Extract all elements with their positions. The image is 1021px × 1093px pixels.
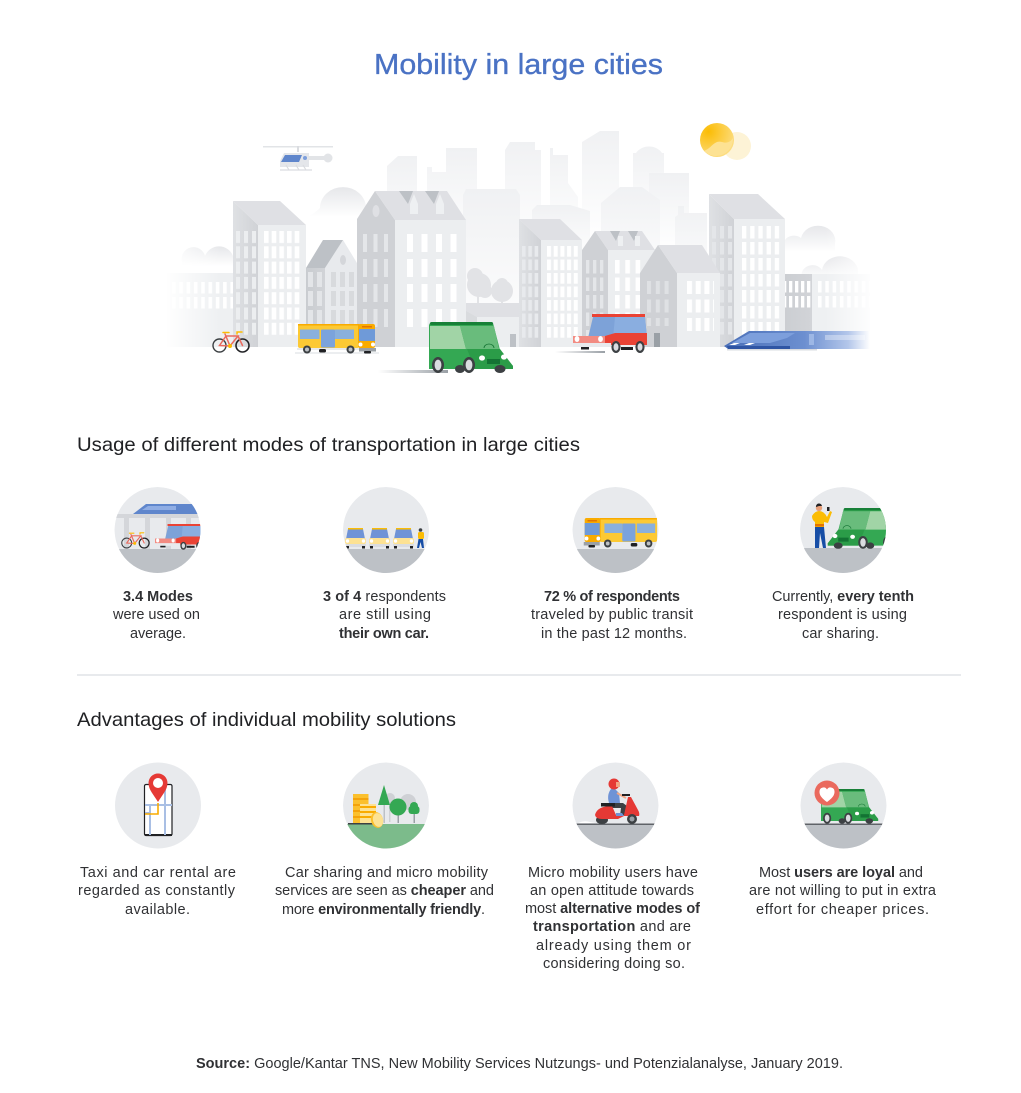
icon: coins and trees xyxy=(343,762,429,848)
icon: bicycle xyxy=(213,332,249,352)
caption: own car xyxy=(323,589,446,642)
small house xyxy=(306,240,360,347)
caption: own car: their own car. xyxy=(339,626,429,642)
icon: train, bike and car xyxy=(114,487,204,573)
panel: own car xyxy=(323,487,446,642)
building D xyxy=(519,219,582,347)
icon: three cars and person xyxy=(343,487,429,573)
caption: loyal users: effort for cheaper prices. xyxy=(756,902,929,918)
building A xyxy=(233,201,306,347)
caption: car sharing: respondent is using xyxy=(778,607,907,623)
icon: bus xyxy=(572,487,660,573)
caption: public transit: traveled by public transit xyxy=(531,607,693,623)
caption: car sharing: Currently, every tenth xyxy=(772,589,914,605)
source note: Source: Google/Kantar TNS, New Mobility Services Nutzungs- und Potenzialanalyse, January 2019. xyxy=(196,1056,843,1072)
caption: micro mobility xyxy=(525,865,700,972)
caption: average modes: average. xyxy=(130,626,186,642)
trees xyxy=(467,268,513,305)
caption: cheaper and greener: services are seen as cheaper and xyxy=(275,883,494,899)
caption: micro mobility: Micro mobility users have xyxy=(528,865,698,881)
house B xyxy=(582,231,655,347)
caption: loyal users: are not willing to put in extra xyxy=(749,883,937,899)
caption: car sharing xyxy=(772,589,914,642)
caption: micro mobility: already using them or xyxy=(536,938,691,954)
caption: car sharing: car sharing. xyxy=(802,626,879,642)
caption: average modes: were used on xyxy=(112,607,200,623)
caption: loyal users xyxy=(749,865,937,918)
caption: taxi and car rental: available. xyxy=(125,902,190,918)
panel: average modes xyxy=(112,487,204,642)
icon: person and green van xyxy=(800,487,895,573)
side fades xyxy=(165,180,875,350)
caption: taxi and car rental: Taxi and car rental are xyxy=(80,865,236,881)
panel: cheaper and greener xyxy=(275,762,494,918)
low building xyxy=(452,303,547,347)
house C xyxy=(640,245,720,347)
icon: helicopter xyxy=(263,146,333,170)
caption: micro mobility: transportation and are xyxy=(533,919,691,935)
caption: average modes xyxy=(112,589,200,642)
far left building xyxy=(167,273,233,347)
caption: own car: 3 of 4 respondents xyxy=(323,589,446,605)
icon: train xyxy=(724,331,870,350)
caption: micro mobility: an open attitude towards xyxy=(530,883,694,899)
icon: green van with heart xyxy=(800,762,888,850)
caption: taxi and car rental xyxy=(78,865,236,918)
panel: public transit xyxy=(531,487,693,642)
tall right building xyxy=(709,194,785,347)
panel: loyal users xyxy=(749,762,937,918)
caption: public transit: 72 % of respondents xyxy=(544,589,680,605)
caption: cheaper and greener xyxy=(275,865,494,918)
background skyline xyxy=(387,131,707,347)
big house xyxy=(357,191,466,347)
icon: sun xyxy=(700,123,751,160)
panel: micro mobility xyxy=(525,762,700,972)
icon: scooter rider xyxy=(572,762,660,850)
heading: usage: Usage of different modes of transportation in large cities xyxy=(77,434,580,456)
caption: loyal users: Most users are loyal and xyxy=(759,865,923,881)
caption: public transit xyxy=(531,589,693,642)
panel: taxi and car rental xyxy=(78,762,236,918)
heading: advantages: Advantages of individual mobility solutions xyxy=(77,709,456,731)
caption: average modes: 3.4 Modes xyxy=(123,589,193,605)
caption: taxi and car rental: regarded as constantly xyxy=(78,883,236,899)
caption: cheaper and greener: more environmentally friendly. xyxy=(282,902,485,918)
icon: phone with map pin xyxy=(115,762,201,848)
caption: micro mobility: considering doing so. xyxy=(543,956,685,972)
caption: own car: are still using xyxy=(339,607,431,623)
far right building xyxy=(775,274,870,347)
title: Mobility in large cities xyxy=(374,49,663,81)
clouds xyxy=(182,187,858,280)
icon: red car xyxy=(555,314,647,353)
caption: public transit: in the past 12 months. xyxy=(541,626,687,642)
caption: cheaper and greener: Car sharing and micro mobility xyxy=(285,865,489,881)
city illustration xyxy=(165,123,875,373)
icon: bus xyxy=(295,324,379,354)
panel: car sharing xyxy=(772,487,914,642)
icon: green van xyxy=(378,322,513,373)
caption: micro mobility: most alternative modes of xyxy=(525,901,700,917)
